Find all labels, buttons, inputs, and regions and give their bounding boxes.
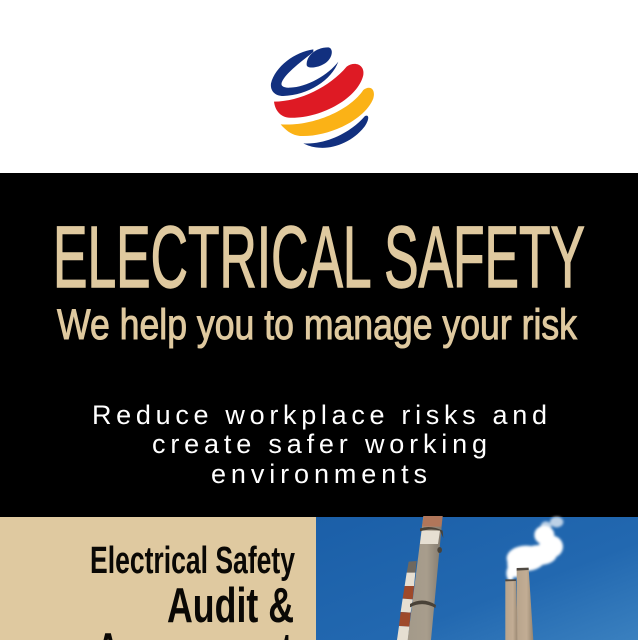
tagline: environments — [211, 459, 427, 489]
rear striped chimney — [397, 561, 417, 640]
tagline: create safer working — [152, 429, 487, 459]
smoke plume — [506, 517, 563, 581]
heading: audit and: Audit & — [167, 579, 294, 633]
logo: red band — [274, 64, 364, 118]
logo: navy blob — [307, 47, 332, 68]
panel: beige audit heading — [0, 517, 316, 640]
front chimney — [408, 516, 443, 640]
logo: navy swoosh — [271, 49, 338, 96]
logo: lower navy band — [303, 116, 368, 148]
black banner panel — [0, 173, 638, 517]
tagline: Reduce workplace risks and — [92, 400, 547, 430]
logo: yellow band — [281, 88, 374, 136]
logo: striped globe — [271, 47, 374, 148]
tagline — [92, 400, 547, 489]
twin chimneys — [505, 568, 533, 640]
heading: electrical safety: Electrical Safety — [90, 540, 295, 582]
photo: power plant chimneys — [316, 516, 638, 640]
